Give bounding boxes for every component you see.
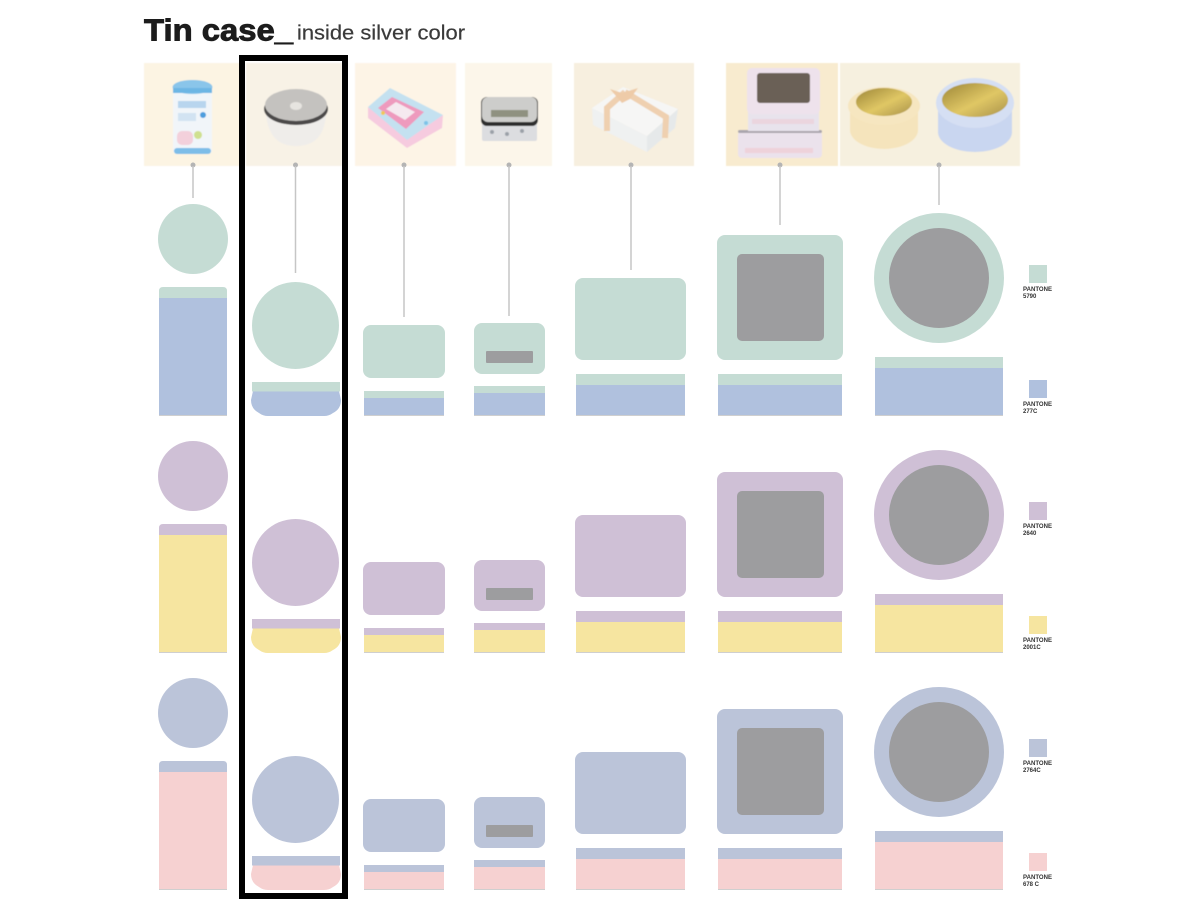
- photo: round low tin: [246, 63, 342, 166]
- swatch: pink: 678 C: [1023, 882, 1040, 888]
- highlight frame around second column: [242, 58, 345, 896]
- swatch: pink: PANTONE: [1023, 875, 1052, 881]
- swatch: purple: 2640: [1023, 531, 1037, 537]
- pantone swatch legend: [1023, 265, 1052, 888]
- swatch: purple: PANTONE: [1023, 524, 1052, 530]
- swatch: yellow: 2001C: [1023, 645, 1041, 651]
- product photos: [144, 63, 1020, 166]
- swatch: pink: [1023, 853, 1052, 888]
- connector lines: [190, 162, 942, 317]
- swatch: slate: [1023, 739, 1052, 774]
- photo: tall round tin: [144, 63, 240, 166]
- swatch: blue: [1023, 380, 1052, 415]
- title: inside silver color: [297, 22, 465, 44]
- photo: tin with slot: [465, 63, 552, 166]
- swatch: yellow: PANTONE: [1023, 638, 1052, 644]
- swatch: green: PANTONE: [1023, 287, 1052, 293]
- photo: stacked square tins: [726, 63, 838, 166]
- title: Tin case_: [144, 12, 294, 48]
- colour row 3: slate and pink: [158, 678, 1004, 890]
- colour row 2: purple and yellow: [158, 441, 1004, 653]
- swatch: blue: PANTONE: [1023, 402, 1052, 408]
- swatch: yellow: [1023, 616, 1052, 651]
- colour row 1: green and blue: [158, 204, 1004, 416]
- swatch: purple: [1023, 502, 1052, 537]
- photo: two open round tins: [840, 63, 1020, 166]
- photo: white tin with ribbon: [574, 63, 694, 166]
- title: [144, 12, 465, 48]
- swatch: green: [1023, 265, 1052, 300]
- swatch: blue: 277C: [1023, 409, 1038, 415]
- photo: rectangular colourful tin: [355, 63, 456, 166]
- swatch: slate: PANTONE: [1023, 761, 1052, 767]
- swatch: slate: 2764C: [1023, 768, 1041, 774]
- swatch: green: 5790: [1023, 294, 1037, 300]
